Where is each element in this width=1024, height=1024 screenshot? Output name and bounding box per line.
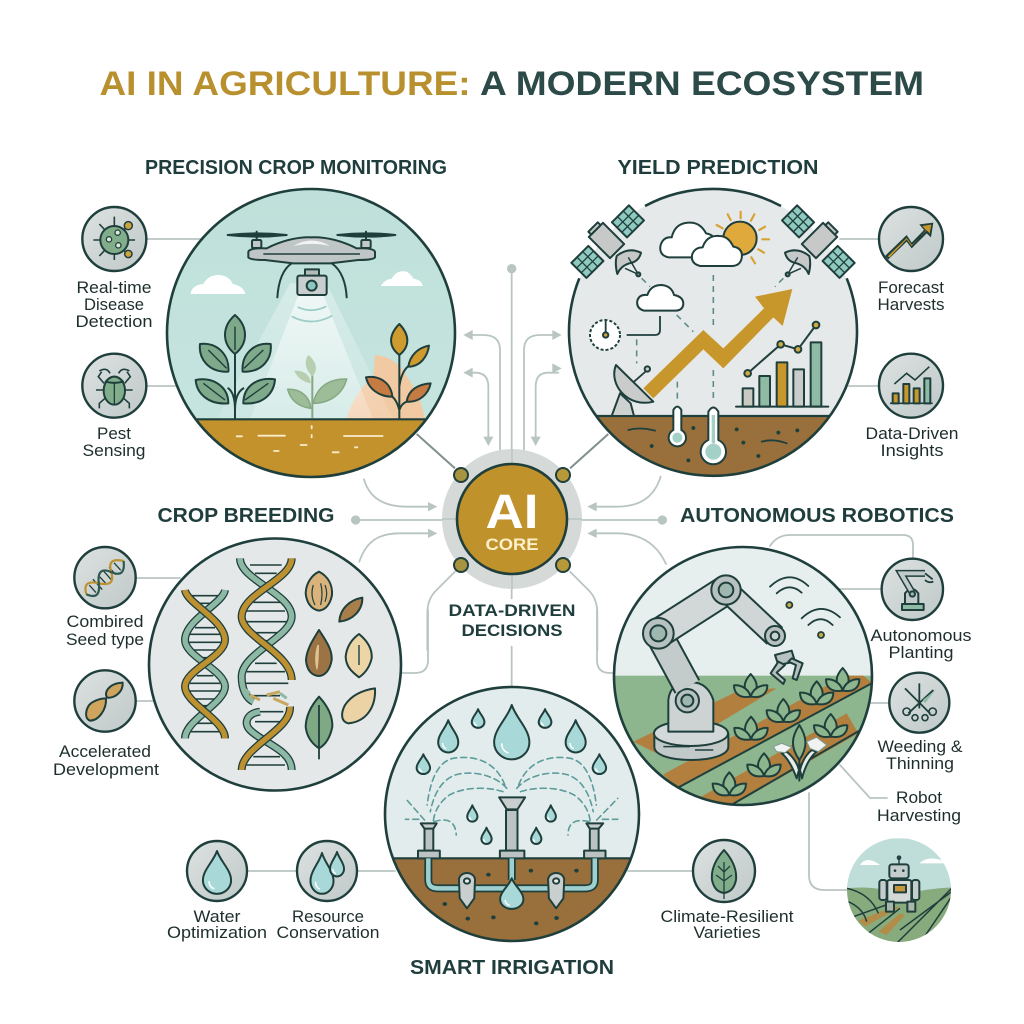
heading: precision crop monitoring: PRECISION CROP MONITORING	[145, 157, 447, 179]
panel: crop breeding scene	[149, 538, 401, 790]
underground pipe	[428, 858, 595, 909]
background	[567, 187, 860, 420]
label: climate-resilient varieties: Varieties	[694, 924, 760, 942]
label: forecast harvests	[878, 279, 944, 314]
label: real-time disease detection	[76, 279, 152, 331]
label: resource conservation: Resource	[292, 908, 364, 926]
label: weeding and thinning: Weeding &	[878, 738, 962, 756]
crop plants	[713, 668, 859, 795]
label: autonomous planting	[870, 627, 972, 662]
label: weeding and thinning: Thinning	[886, 755, 954, 773]
soil	[394, 859, 630, 940]
label: pest sensing: Sensing	[82, 442, 146, 460]
label: climate-resilient varieties	[660, 908, 794, 942]
title	[100, 65, 924, 103]
heading: yield prediction: YIELD PREDICTION	[618, 157, 818, 179]
field	[610, 676, 877, 812]
clouds	[191, 271, 423, 294]
growth arrow	[643, 289, 792, 398]
sky	[610, 543, 877, 677]
label: combined seed type: Combired	[66, 613, 144, 631]
label: climate-resilient varieties: Climate-Resilient	[660, 908, 794, 926]
title: A MODERN ECOSYSTEM	[480, 65, 924, 103]
soil	[598, 417, 828, 477]
panel: yield prediction scene	[564, 187, 862, 479]
heading: autonomous robotics: AUTONOMOUS ROBOTICS	[680, 505, 954, 527]
label: combined seed type	[66, 613, 144, 649]
water drops	[417, 705, 606, 844]
soil	[198, 420, 424, 476]
dashed data links	[637, 275, 783, 403]
heading: crop breeding: CROP BREEDING	[158, 505, 334, 527]
sun	[717, 212, 769, 263]
label: autonomous planting: Planting	[888, 644, 954, 662]
label: robot harvesting: Harvesting	[877, 807, 961, 825]
label: data-driven insights: Insights	[880, 442, 944, 460]
icon: data-driven insights	[879, 354, 943, 418]
AI core hub: CORE	[486, 535, 538, 554]
stressed plant	[366, 324, 431, 418]
robot arm	[643, 575, 803, 760]
connector lines	[136, 239, 913, 890]
label: data-driven insights	[866, 425, 958, 460]
label: accelerated development: Accelerated	[59, 743, 151, 761]
seeds	[306, 572, 375, 759]
spray arcs	[405, 757, 618, 835]
label: real-time disease detection: Disease	[84, 296, 144, 314]
label: robot harvesting: Robot	[896, 789, 942, 807]
icon: resource conservation	[297, 841, 357, 901]
label: resource conservation: Conservation	[276, 924, 380, 942]
icon: accelerated development	[74, 670, 136, 732]
heading: data-driven decisions: DECISIONS	[462, 621, 562, 640]
panel: autonomous robotics scene	[610, 543, 877, 812]
label: real-time disease detection: Real-time	[76, 279, 152, 297]
satellite left	[564, 198, 646, 280]
icon: disease detection	[82, 207, 146, 271]
sprinklers	[418, 797, 606, 858]
drone	[228, 232, 395, 322]
background	[386, 688, 638, 858]
AI core hub	[442, 449, 582, 589]
satellite right	[780, 198, 862, 280]
satellite dish	[612, 365, 653, 416]
panel: precision crop monitoring scene	[167, 188, 457, 479]
label: data-driven insights: Data-Driven	[866, 425, 958, 443]
icon: water optimization	[187, 841, 247, 901]
label: combined seed type: Seed type	[66, 631, 144, 649]
heading: data-driven decisions	[448, 601, 576, 640]
stress patch	[347, 355, 425, 419]
label: forecast harvests: Harvests	[878, 296, 944, 314]
label: water optimization	[167, 908, 267, 942]
sky	[167, 188, 457, 422]
AI core hub: AI	[486, 486, 538, 539]
title: AI IN AGRICULTURE:	[100, 65, 470, 103]
label: pest sensing	[82, 425, 146, 460]
label: forecast harvests: Forecast	[878, 279, 944, 297]
panel: smart irrigation scene	[377, 680, 648, 948]
weather clouds	[660, 223, 717, 257]
gauge	[590, 316, 660, 350]
label: resource conservation	[276, 908, 380, 942]
label: real-time disease detection: Detection	[76, 313, 152, 331]
icon: combined seed type	[74, 547, 136, 608]
soil rows	[633, 676, 872, 807]
label: accelerated development	[53, 743, 159, 779]
struggling plant	[288, 355, 347, 418]
label: water optimization: Optimization	[167, 924, 267, 942]
right dna helix	[240, 558, 292, 770]
label: water optimization: Water	[194, 908, 241, 926]
icon: autonomous planting	[882, 559, 943, 620]
icon: weeding and thinning	[889, 673, 949, 733]
bar chart	[736, 322, 828, 407]
healthy plant	[196, 315, 275, 418]
heading: data-driven decisions: DATA-DRIVEN	[448, 601, 576, 620]
label: accelerated development: Development	[53, 761, 159, 779]
icon: pest sensing	[82, 354, 146, 418]
label: pest sensing: Pest	[97, 425, 131, 443]
thermometers	[669, 407, 726, 464]
heading: smart irrigation: SMART IRRIGATION	[410, 957, 614, 979]
icon: forecast harvests	[879, 207, 943, 271]
label: weeding and thinning	[878, 738, 962, 773]
icon: climate resilient varieties	[693, 840, 755, 902]
weed being treated	[773, 725, 827, 781]
label: autonomous planting: Autonomous	[870, 627, 972, 645]
icon: robot harvesting field scene	[847, 838, 953, 943]
scanner beam	[217, 283, 393, 419]
left dna helix	[185, 590, 225, 738]
label: robot harvesting	[877, 789, 961, 825]
wireless signals	[770, 577, 840, 638]
